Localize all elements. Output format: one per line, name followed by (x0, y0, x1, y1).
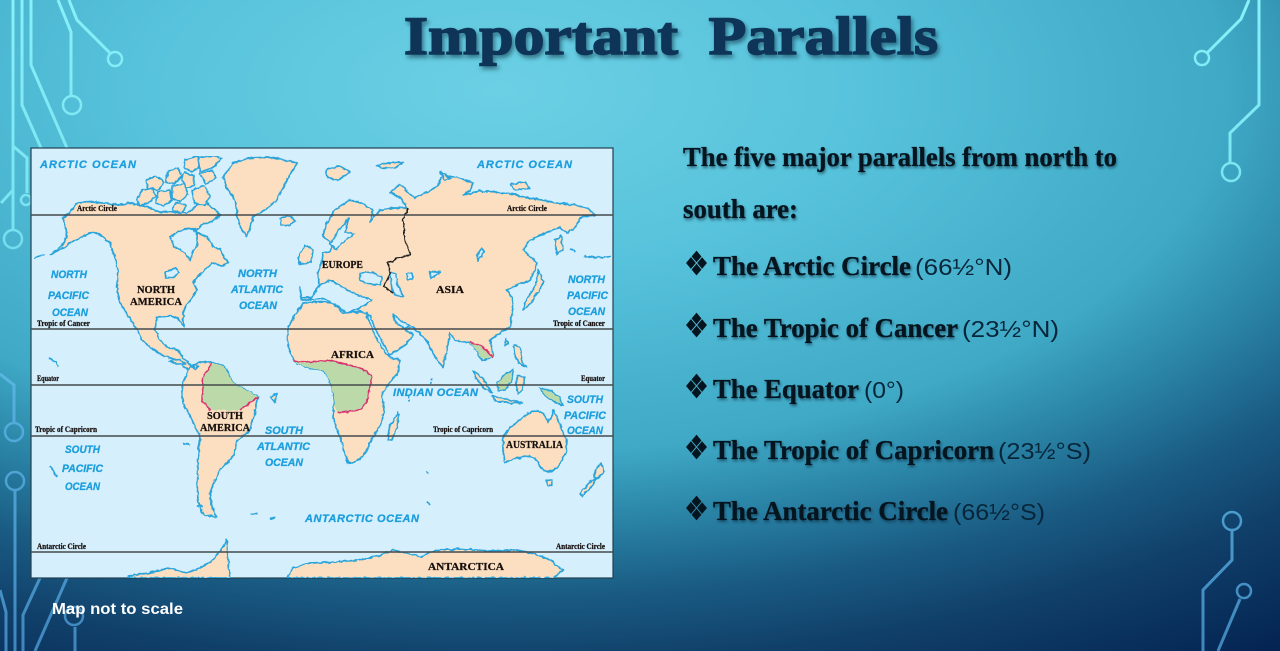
circuit decoration: bottom left (0, 374, 83, 651)
Africa (288, 302, 400, 463)
world map (31, 148, 613, 578)
parallel labels: Antarctic Circle (556, 542, 605, 551)
list: parallels (684, 244, 1091, 528)
item: Tropic of Capricorn (684, 428, 1091, 467)
ocean labels: ARCTIC OCEAN (476, 159, 573, 171)
circuit decoration: bottom right (1203, 512, 1251, 651)
Greenland (223, 157, 297, 237)
item: Equator: The Equator (713, 374, 859, 404)
ocean labels: OCEAN (239, 300, 278, 312)
item: Arctic Circle: (66½°N) (915, 254, 1012, 280)
ocean labels: ANTARCTIC OCEAN (304, 513, 420, 525)
parallel labels: Equator (581, 374, 605, 383)
parallel labels: Tropic of Capricorn (35, 425, 97, 434)
ocean labels: NORTH (568, 274, 606, 286)
item: Antarctic Circle (684, 489, 1045, 528)
item: Arctic Circle (684, 244, 1012, 283)
item: Equator (684, 367, 904, 406)
item: Tropic of Cancer (684, 306, 1059, 345)
item: Antarctic Circle: (66½°S) (953, 499, 1045, 525)
ocean labels: SOUTH (65, 444, 101, 456)
item: Equator: (0°) (864, 377, 904, 403)
North America (50, 202, 228, 371)
continent labels: NORTH (137, 284, 175, 296)
ocean labels: NORTH (51, 269, 88, 281)
item: Tropic of Cancer: (23½°N) (962, 316, 1059, 342)
intro text (683, 142, 1117, 224)
parallel labels: Equator (37, 374, 59, 383)
parallel lines (31, 215, 613, 552)
parallel labels: Tropic of Cancer (37, 319, 90, 328)
map background (31, 148, 613, 578)
pink tropical border (202, 342, 493, 413)
ocean labels (39, 159, 609, 525)
continent labels: EUROPE (322, 259, 363, 271)
item: Tropic of Cancer: ❖ (684, 306, 709, 345)
ocean labels: OCEAN (265, 457, 304, 469)
ocean labels: ATLANTIC (230, 284, 284, 296)
ocean labels: INDIAN OCEAN (393, 387, 479, 399)
item: Antarctic Circle: The Antarctic Circle (713, 496, 948, 526)
item: Arctic Circle: The Arctic Circle (713, 251, 911, 281)
item: Tropic of Capricorn: ❖ (684, 428, 709, 467)
item: Equator: ❖ (684, 367, 709, 406)
ocean labels: ATLANTIC (256, 441, 311, 453)
map caption: Map not to scale (52, 601, 183, 618)
parallel labels: Tropic of Cancer (553, 319, 605, 328)
item: Tropic of Capricorn: The Tropic of Capricorn (713, 435, 994, 465)
Australia (503, 410, 567, 472)
continent labels: SOUTH (207, 410, 243, 422)
intro text: south are: (683, 194, 798, 224)
land masses (34, 156, 611, 578)
ocean labels: OCEAN (567, 425, 604, 437)
ocean labels: OCEAN (52, 307, 89, 319)
item: Antarctic Circle: ❖ (684, 489, 709, 528)
continent labels: AMERICA (200, 422, 250, 434)
Eurasia (300, 175, 595, 367)
item: Arctic Circle: ❖ (684, 244, 709, 283)
ocean labels: OCEAN (65, 481, 101, 493)
ocean labels: PACIFIC (567, 290, 609, 302)
parallel labels: Arctic Circle (77, 204, 117, 213)
small islands (34, 162, 611, 519)
ocean labels: PACIFIC (48, 290, 90, 302)
continent labels: ASIA (436, 284, 464, 296)
intro text: The five major parallels from north to (683, 142, 1117, 172)
title: Important Parallels (404, 6, 938, 66)
circuit decoration: top right (1195, 0, 1259, 181)
Antarctica (287, 549, 563, 578)
parallel labels: Arctic Circle (507, 204, 547, 213)
parallel labels: Antarctic Circle (37, 542, 86, 551)
continent labels: ANTARCTICA (428, 561, 504, 573)
continent labels: AFRICA (331, 349, 374, 361)
Russia border (384, 208, 410, 293)
green tropical zones (202, 364, 258, 410)
ocean labels: PACIFIC (564, 410, 607, 422)
South America (182, 362, 258, 517)
Arctic islands (137, 156, 295, 226)
continent labels: AMERICA (130, 296, 182, 308)
ocean labels: SOUTH (567, 394, 604, 406)
Antarctic peninsula (127, 540, 230, 578)
ocean labels: PACIFIC (62, 463, 104, 475)
inland seas (310, 280, 372, 313)
ocean labels: SOUTH (265, 425, 304, 437)
item: Tropic of Capricorn: (23½°S) (998, 438, 1091, 464)
circuit decoration: top left (1, 0, 122, 248)
item: Tropic of Cancer: The Tropic of Cancer (713, 313, 958, 343)
ocean labels: OCEAN (568, 306, 606, 318)
continent labels: AUSTRALIA (506, 439, 563, 451)
parallel labels: Tropic of Capricorn (433, 425, 493, 434)
continent labels (130, 259, 563, 573)
ocean labels: NORTH (238, 268, 278, 280)
parallel labels (35, 204, 605, 551)
ocean labels: ARCTIC OCEAN (39, 159, 137, 171)
